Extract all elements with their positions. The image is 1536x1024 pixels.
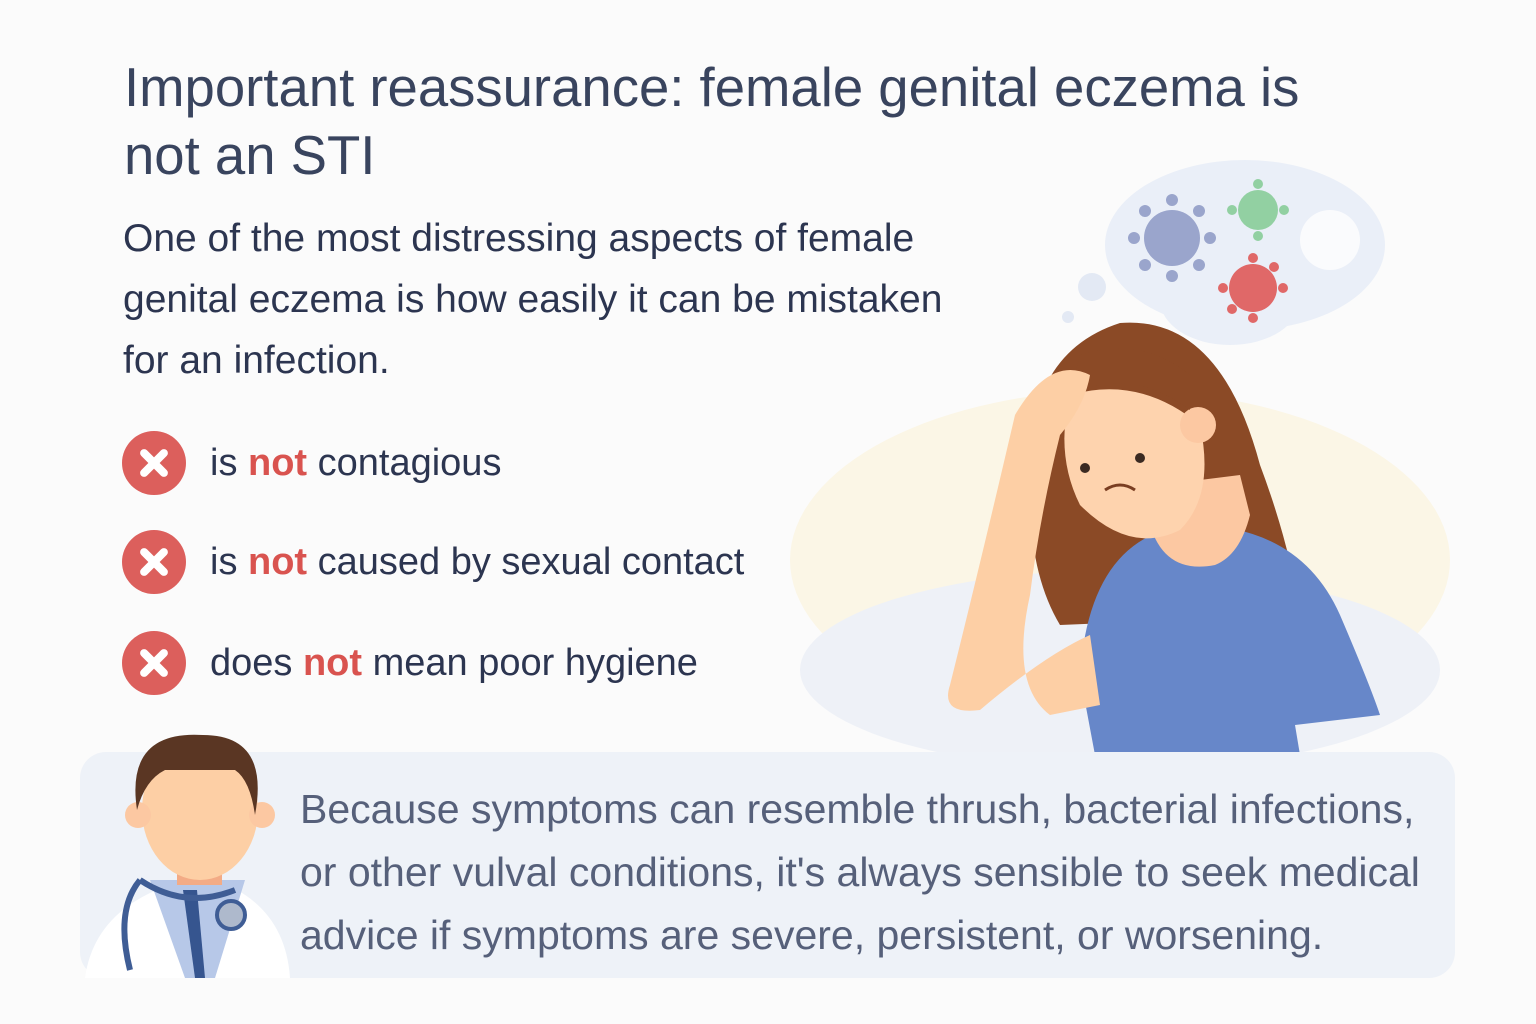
doctor icon [86, 734, 290, 978]
item: not poor hygiene [122, 631, 698, 695]
item: not sexual contact: is caused by sexual contact [210, 540, 744, 582]
item: not contagious: not [248, 442, 307, 484]
item: not sexual contact: not [248, 540, 307, 582]
thought bubble with germs [1062, 160, 1385, 345]
item: not poor hygiene: does mean poor hygiene [210, 642, 698, 684]
item: not contagious: is contagious [210, 442, 501, 484]
background cloud [790, 397, 1450, 752]
item: not sexual contact [122, 530, 744, 594]
item: not poor hygiene: not [303, 642, 362, 684]
woman illustration [948, 322, 1380, 752]
title: Important reassurance: female genital eczema is not an STI [124, 57, 1299, 186]
advice text: Because symptoms can resemble thrush, bacterial infections, or other vulval conditions, it's always sensible to seek medical advice if symptoms are severe, persistent, or worsening. [300, 786, 1420, 958]
item: not contagious [122, 431, 501, 495]
bottom advice panel [80, 752, 1455, 978]
intro text: One of the most distressing aspects of female genital eczema is how easily it can be mistaken for an infection. [123, 217, 942, 382]
